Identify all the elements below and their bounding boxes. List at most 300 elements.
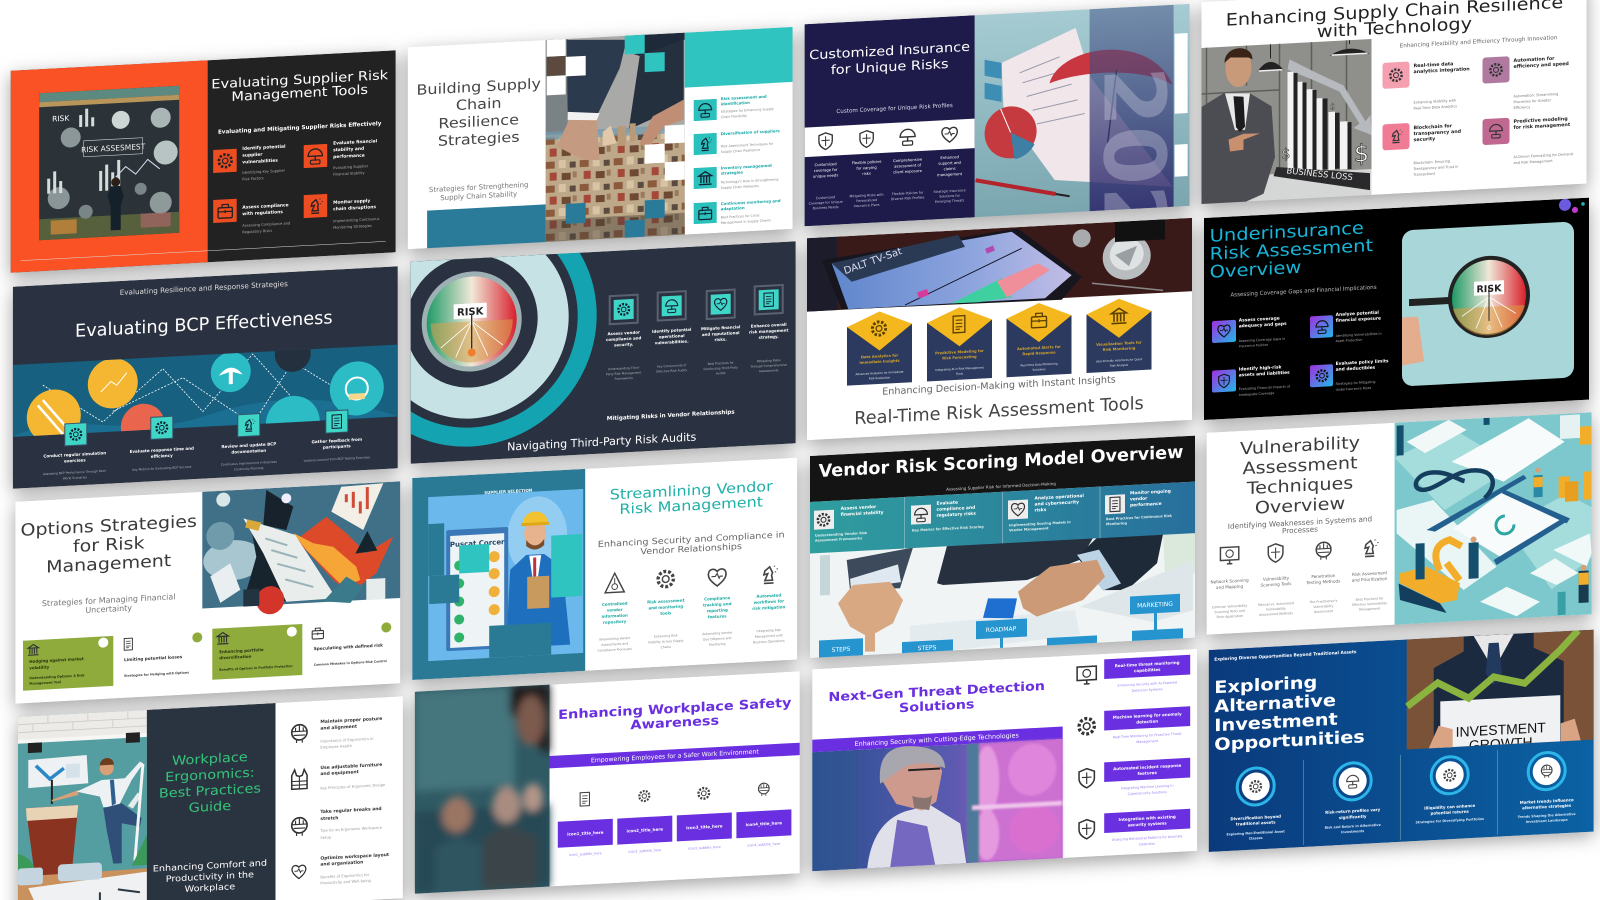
item 2: Evaluate financial — [333, 138, 378, 147]
column 1 — [606, 329, 642, 381]
column 3: Best Practices for — [708, 361, 735, 366]
item 4 — [304, 436, 370, 463]
slide: Vulnerability Assessment Techniques Overview — [1207, 412, 1592, 635]
column 2: Risk and Return in Alternative — [1325, 823, 1382, 830]
item 4: Management in Supply Chains — [721, 218, 771, 225]
column 4: Best Practices for Continuous Risk — [1106, 514, 1173, 521]
item 3 — [319, 806, 383, 840]
slide: Real-Time Risk Assessment Tools — [807, 218, 1192, 440]
band subtitle: Empowering Employees for a Safer Work Environment — [591, 748, 759, 764]
column 4: management — [937, 172, 963, 177]
item 2: stability and — [333, 146, 364, 153]
column 1: Frameworks — [615, 376, 633, 381]
card 4: Speculating with defined risk — [314, 643, 383, 651]
card 2: Risk Forecasting — [942, 355, 977, 361]
column 3: Illiquidity can enhance — [1424, 803, 1476, 811]
title: Resilience — [438, 111, 519, 132]
column 2: risks — [862, 172, 871, 176]
item 4: and organization — [320, 859, 363, 868]
column 4 — [752, 592, 785, 644]
item 3 — [1104, 758, 1190, 797]
card 4: User-Friendly Interfaces for Quick — [1096, 357, 1143, 363]
column 1: information — [601, 613, 628, 619]
column 1: security. — [614, 341, 634, 348]
title: Overview — [1255, 494, 1345, 518]
item 4: Benefits of Ergonomics for — [320, 873, 370, 879]
card 3 — [1006, 301, 1072, 377]
item 4: Gather feedback from — [312, 437, 362, 444]
card 1 — [847, 310, 912, 386]
column 1: vendor — [607, 607, 623, 613]
header band — [810, 436, 1195, 502]
blurred photo: people pointing — [415, 685, 550, 894]
title: for Unique Risks — [831, 57, 949, 78]
box 2 — [617, 816, 672, 854]
item 2: and equipment — [320, 769, 360, 777]
illustration: engineer and checklist: Puscat Corcer — [450, 538, 505, 549]
roadmap boxes: MARKETING — [1137, 601, 1173, 610]
item 2: Use adjustable furniture — [320, 762, 382, 771]
card 2 — [927, 305, 992, 381]
column 1: Centralized — [602, 601, 628, 607]
picture: magnifier on risk gauge: 0 — [1487, 325, 1491, 332]
column 4 — [1106, 488, 1173, 526]
card 1: Management Tool — [29, 680, 61, 686]
title: with Technology — [1317, 14, 1472, 42]
item 3: Tips for an Ergonomic Workspace — [319, 826, 383, 833]
card 3: diversification — [219, 654, 252, 660]
box 3 — [677, 812, 732, 851]
slide: Underinsurance Risk Assessment Overview — [1204, 198, 1589, 420]
item 4: Productivity and Well-being — [320, 879, 371, 885]
subtitle: Processes — [1282, 525, 1318, 536]
column 4 — [1518, 797, 1576, 824]
item 3: Blockchain: Ensuring — [1414, 159, 1450, 165]
icons — [213, 144, 327, 223]
roadmap boxes: STEPS — [918, 644, 937, 652]
column 2: for varying — [856, 166, 877, 171]
picture: magnifier on risk gauge — [1402, 221, 1574, 387]
item 1 — [1104, 655, 1190, 694]
item 3: Blockchain for — [1414, 123, 1453, 131]
subtitle: Enhancing Comfort and — [153, 859, 267, 874]
title: Techniques — [1246, 473, 1353, 499]
column 3: Compliance — [704, 595, 731, 602]
column 1: Assess vendor — [607, 330, 640, 336]
column 2: Flexible policies — [852, 160, 882, 165]
item 4: Evaluate policy limits — [1336, 358, 1389, 367]
column 3: Assessment — [1314, 609, 1334, 614]
title: Vendor Risk Scoring Model Overview — [819, 443, 1183, 482]
card 1: Data Analytics for — [861, 353, 898, 359]
column 4: Integrating Risk — [757, 628, 781, 633]
item 4: Monitor supply — [333, 198, 370, 206]
item 1: exercises — [64, 457, 86, 463]
column 2 — [850, 160, 884, 208]
blue band — [427, 203, 566, 249]
column 1: Party Risk Management — [606, 370, 642, 376]
column 4: Management with — [755, 633, 783, 639]
item 2: efficiency — [151, 453, 173, 459]
column 1: Customized — [816, 195, 835, 200]
column 3: Flexible Policies for — [892, 190, 924, 196]
column 2: Manual vs. Automated — [1258, 601, 1294, 607]
column 2 — [652, 327, 692, 374]
item icons — [694, 99, 717, 224]
title: Exploring — [1214, 673, 1317, 698]
card 4: Visualization Tools for — [1096, 341, 1142, 347]
item 3 — [720, 162, 778, 190]
card 4: Risk Monitoring — [1103, 346, 1136, 352]
column 1: Assessment Frameworks — [815, 536, 862, 543]
subtitle: Identifying Weaknesses in Systems and — [1228, 514, 1372, 531]
title: Chain — [456, 95, 502, 114]
item 4: Predictive modeling — [1514, 116, 1568, 125]
column 3: Analyze operational — [1034, 493, 1084, 502]
column 3: Vulnerability — [1313, 604, 1333, 609]
card 3: Automated Alerts for — [1017, 345, 1061, 351]
column 2: Chains — [661, 645, 671, 649]
card 2: Strategies for Hedging with Options — [124, 670, 189, 678]
column 4: Trends Shaping the Alternative — [1518, 812, 1576, 819]
column 3: Mitigate financial — [701, 324, 741, 331]
dark panel — [147, 703, 276, 900]
item 2: Processes for Greater — [1514, 98, 1552, 104]
column 4: Assessments — [759, 368, 779, 373]
column 1: Assessments and — [601, 642, 628, 647]
illustration: burning newspaper — [202, 481, 400, 618]
roadmap boxes — [819, 594, 1183, 661]
column 3 — [891, 157, 925, 201]
subtitle: Mitigating Risks in Vendor Relationships — [607, 410, 735, 422]
band icons — [819, 126, 957, 150]
column 4: and Prioritization — [1352, 576, 1388, 583]
chalkboard picture: RISK — [52, 114, 70, 124]
box 1: icon1_subtitle_here — [569, 851, 602, 857]
item 4: Optimize workspace layout — [320, 852, 390, 862]
item 3: Integrating Machine Learning in — [1121, 784, 1173, 790]
purple band — [550, 743, 800, 768]
column 2: Visibility Across Supply — [648, 639, 684, 645]
column 1: Business Needs — [813, 205, 839, 210]
column 1: Scanning Tools and — [1214, 609, 1245, 614]
column 3: Strategies for Diversifying Portfolios — [1415, 817, 1484, 825]
column 3: Due Diligence and — [703, 636, 731, 642]
item 3 — [242, 202, 290, 234]
icons — [605, 565, 777, 593]
slide: Workplace Ergonomics Best Practices Guide — [18, 696, 403, 900]
column 4 — [749, 322, 788, 374]
card 4: Common Mistakes in Options Risk Control — [314, 659, 387, 667]
item 3: security — [1414, 136, 1436, 143]
column 4 — [1352, 570, 1388, 612]
title: Assessment — [1242, 453, 1358, 479]
purple band — [812, 727, 1063, 752]
slide: Evaluating Supplier Risk Management Tools — [11, 50, 396, 273]
item 4: Detection — [1139, 842, 1155, 846]
item 4: Continuous monitoring and — [721, 198, 781, 206]
column 1: Exploring Non-Traditional Asset — [1227, 829, 1285, 837]
column 3 — [1009, 493, 1084, 532]
column 4: Monitoring — [1106, 521, 1127, 526]
column 3: Comprehensive — [893, 158, 923, 163]
photo: dashboard tablet on desk: DALT TV-Sat — [843, 246, 903, 277]
column 2: Investments — [1341, 829, 1364, 834]
item 4: participants — [323, 443, 351, 450]
column 4: claims — [944, 167, 956, 171]
item 2: Key Metrics for Evaluating BCP Success — [132, 465, 192, 472]
item 3: with regulations — [242, 209, 283, 217]
title: Risk Management — [619, 493, 763, 518]
item 1 — [320, 716, 382, 750]
item 1: Real-time data — [1414, 61, 1453, 69]
badge 3 — [1431, 756, 1468, 795]
item 1 — [1239, 315, 1287, 348]
title: Management — [46, 551, 171, 577]
item 3: Inventory management — [721, 163, 772, 171]
column 2: Insurance Plans — [854, 203, 880, 208]
photo: investor with growth sign: GROWTH — [1469, 734, 1533, 753]
column 1: Understanding Third- — [608, 366, 640, 371]
card 1: Hedging against market — [29, 656, 84, 664]
icons — [65, 407, 348, 447]
column 2: Assessment Methods — [1259, 611, 1293, 617]
item 1: Assessing BCP Performance Through Real- — [43, 469, 107, 476]
icons — [580, 783, 769, 806]
column 3: The Practitioner's — [1308, 599, 1338, 604]
item 3: Cybersecurity Solutions — [1128, 790, 1167, 796]
item 4 — [1104, 809, 1190, 848]
title: Customized Insurance — [809, 40, 970, 63]
item 4: Lessons Learned from BCP Testing Exercises — [304, 455, 370, 463]
column 3: and reputational — [702, 330, 740, 337]
column 3: Diverse Risk Profiles — [891, 195, 925, 201]
item 3: Setup — [320, 835, 332, 840]
column 3 — [701, 324, 741, 376]
item 1 — [721, 93, 774, 119]
subtitle: Supply Chain Stability — [440, 190, 517, 202]
title: Workplace — [172, 750, 248, 769]
title: Risk Assessment — [1210, 236, 1373, 264]
item 1: adequacy and gaps — [1239, 321, 1287, 329]
card 2: Predictive Modeling for — [935, 349, 984, 356]
column 4: Investment Landscape — [1526, 818, 1568, 824]
column 1: and Mapping — [1216, 584, 1244, 590]
photo: scientist with pink scans — [812, 738, 1063, 871]
column 2: Risk-return profiles vary — [1325, 807, 1381, 815]
dark overlay column — [1090, 5, 1174, 211]
column 3: reporting — [707, 607, 728, 613]
white icon band — [805, 119, 975, 157]
card 2 — [124, 632, 202, 678]
item 1: Risk Factors — [242, 176, 264, 181]
item 4: for risk management — [1514, 122, 1571, 131]
item 2 — [333, 138, 378, 177]
item 3: Assess compliance — [242, 202, 289, 211]
item 2: performance — [333, 153, 365, 160]
item 1: Employee Health — [320, 744, 353, 750]
column separators — [1304, 750, 1498, 845]
subtitle: Vendor Relationships — [640, 542, 742, 557]
chalkboard picture — [39, 86, 179, 240]
slide: Building Supply Chain Resilience Strategies — [408, 23, 793, 251]
item 4: adaptation — [721, 205, 745, 211]
column 4: Business Operations — [753, 639, 785, 644]
teal strip — [810, 482, 1195, 554]
column 2: significantly — [1339, 814, 1367, 820]
column 2: Vulnerability — [1266, 606, 1286, 612]
item 3: Evaluating Financial Impacts of — [1239, 384, 1291, 391]
item 1: Chain Flexibility — [721, 114, 747, 119]
title: Underinsurance — [1210, 219, 1364, 246]
item 2: financial exposure — [1336, 315, 1381, 324]
item 2 — [721, 128, 780, 154]
title: Alternative — [1214, 691, 1336, 717]
photo: businessman and falling bars: $ — [1354, 139, 1369, 168]
photo: businessman and falling bars: $ — [1330, 102, 1335, 111]
column 3: features — [708, 613, 727, 619]
card 2: Limiting potential losses — [124, 654, 183, 662]
column 4: performance — [1130, 501, 1162, 509]
teal block — [685, 27, 793, 88]
column 3: Monitoring — [709, 642, 726, 647]
item 2: Asset Protection — [1336, 338, 1362, 343]
column 1: Common Vulnerability — [1212, 604, 1247, 609]
title: Investment — [1214, 710, 1338, 736]
item 3: Continuous Improvement in Business — [221, 460, 277, 467]
column 1 — [815, 504, 884, 543]
item 1: World Scenarios — [63, 475, 87, 481]
column 1 — [1227, 813, 1285, 842]
badge 1 — [1237, 767, 1274, 806]
column 1: Customized — [815, 162, 837, 167]
item 1: analytics integration — [1414, 66, 1470, 75]
column 3: Vendor Management — [1009, 526, 1049, 532]
slide: Enhancing Supply Chain Resilience with Technology — [1202, 0, 1586, 205]
column 3: Implementing Scoring Models in — [1009, 520, 1071, 527]
column 3: Conducting Third-Party — [703, 365, 738, 371]
column 2: Key Metrics for Effective Risk Scoring — [912, 525, 984, 533]
item 3: stretch — [320, 815, 339, 822]
band subtitle: Enhancing Security with Cutting-Edge Technologies — [855, 731, 1019, 748]
item 2: Key Principles of Ergonomic Design — [320, 783, 386, 790]
column 3: Audits — [716, 371, 726, 376]
item 1: Enhancing Security with AI-Powered — [1118, 680, 1177, 688]
card 1: Understanding Options: A Risk — [29, 673, 85, 680]
item 1: Strategies for Enhancing Supply — [721, 107, 774, 114]
column 2: compliance and — [936, 505, 975, 513]
photo: hands over model city — [546, 33, 685, 242]
item 2 — [1336, 310, 1382, 343]
column 2: Mitigating Risks with — [850, 193, 884, 198]
column 2: tools — [660, 610, 672, 616]
item 4: AI-Driven Forecasting for Demand — [1514, 152, 1573, 159]
item 2 — [1514, 55, 1569, 110]
title: Vulnerability — [1240, 433, 1360, 459]
white icons — [814, 494, 1125, 530]
item 3: Transparency and Trust in — [1413, 165, 1458, 171]
title: Streamlining Vendor — [610, 478, 774, 503]
column 4: Effective Vulnerability — [1352, 601, 1387, 607]
item 1: identification — [721, 100, 750, 106]
column 1: Understanding Vendor Risk — [815, 531, 868, 538]
column 4: Solutions for — [939, 194, 961, 199]
column 3: risks — [1034, 507, 1047, 514]
box 4: icon4_title_here — [746, 820, 782, 827]
box 2: icon2_title_here — [627, 827, 663, 833]
item 4: security systems — [1128, 820, 1167, 828]
box 1 — [558, 819, 613, 858]
concentric rings and risk dial — [347, 190, 597, 453]
column 2: Evaluate — [936, 500, 958, 507]
title: Next-Gen Threat Detection — [828, 679, 1045, 705]
column 2: Risk assessment — [647, 598, 685, 605]
item 1: Assess coverage — [1239, 315, 1280, 324]
card 3: Benefits of Options in Portfolio Protection — [219, 664, 293, 672]
orange panel — [11, 60, 208, 273]
item 4: Strategies for Mitigating — [1336, 380, 1376, 386]
column 1: Network Scanning — [1211, 577, 1249, 584]
roadmap boxes: STEPS — [832, 646, 851, 654]
subtitle: Enhancing Security and Compliance in — [598, 531, 785, 550]
title: Evaluating BCP Effectiveness — [75, 308, 333, 342]
item 4: Integration with existing — [1119, 814, 1176, 822]
item 2: Automation for — [1514, 56, 1555, 64]
column 4: Risk Assessment — [1352, 570, 1388, 577]
column 4: Market trends influence — [1520, 797, 1574, 805]
column 2: Enhancing Risk — [654, 633, 678, 639]
item 4: and deductibles — [1336, 365, 1376, 373]
item 2: Automation: Streamlining — [1514, 92, 1558, 98]
item 4: Best Practices for Crisis — [721, 213, 760, 220]
card 4: Risk Analysis — [1110, 363, 1129, 368]
column 1: traditional assets — [1236, 819, 1276, 827]
column 2: operational — [659, 333, 685, 339]
icons — [1077, 666, 1096, 839]
box 4: icon4_subtitle_here — [747, 842, 780, 848]
badge 2 — [1334, 762, 1371, 801]
subtitle: Evaluating Resilience and Response Strategies — [120, 279, 288, 297]
card 1: volatility — [29, 664, 50, 670]
column 2: vulnerabilities. — [655, 339, 689, 345]
slide: Streamlining Vendor Risk Management — [412, 458, 797, 680]
column 2: and monitoring — [648, 604, 683, 610]
box 1: icon1_title_here — [567, 830, 604, 837]
title: Solutions — [899, 697, 974, 716]
column 4: Strategic Insurance — [934, 188, 966, 194]
column 3 — [1305, 573, 1340, 614]
box 3: icon3_subtitle_here — [688, 845, 721, 851]
slide: Exploring Alternative Investment Opportunities — [1209, 630, 1594, 852]
box 2: icon2_subtitle_here — [628, 848, 661, 854]
item 3: Review and update BCP — [221, 441, 276, 449]
column 1: Their Application — [1215, 614, 1243, 619]
column 1: Assess vendor — [841, 504, 877, 512]
card 3: Rapid Response — [1022, 351, 1056, 356]
column 2: Key Components of — [657, 363, 687, 369]
card 3: Enhancing portfolio — [219, 647, 264, 654]
item 1: Detection Systems — [1132, 687, 1163, 693]
column 1: unique needs — [813, 173, 838, 179]
card 1: Immediate Insights — [859, 359, 900, 365]
item 1: Insurance Policies — [1239, 343, 1268, 348]
subtitle: Uncertainty — [85, 604, 132, 615]
illustration: engineer and checklist — [428, 482, 583, 661]
column 3: Penetration — [1311, 573, 1336, 579]
slide: Navigating Third-Party Risk Audits — [347, 179, 796, 467]
column 2: regulatory risks — [936, 511, 976, 519]
subtitle: Evaluating and Mitigating Supplier Risks Effectively — [218, 121, 382, 136]
